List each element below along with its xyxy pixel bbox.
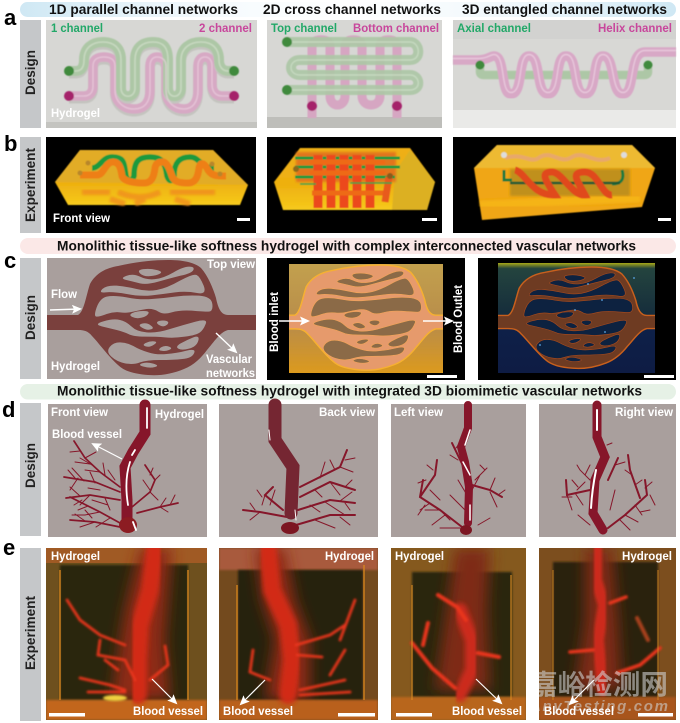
label: Hydrogel: Hydrogel: [51, 361, 100, 373]
panel: perfused vessel photo left: [391, 548, 526, 720]
sidebar: Design row d: [20, 403, 41, 536]
vessel tree: [418, 405, 505, 535]
arrow: flow: [50, 309, 80, 310]
panel: 1D experiment photo: [46, 137, 256, 233]
panel: vascular network design top view: [47, 258, 256, 380]
sidebar: Experiment row b: Experiment: [23, 148, 38, 222]
label: Helix channel: Helix channel: [598, 23, 672, 35]
label: Vascular: Vascular: [206, 354, 252, 366]
perfused vessel: [250, 550, 355, 695]
arrow: blood inlet: [279, 320, 308, 322]
scale bar: [644, 375, 674, 378]
panel: blood inlet outlet photo: [266, 258, 465, 380]
label: Front view: Front view: [53, 213, 110, 225]
sidebar: Design row a: [20, 20, 41, 128]
label: Blood vessel: Blood vessel: [452, 706, 522, 718]
heading: 2D networks: 2D cross channel networks: [263, 2, 441, 17]
label: Hydrogel: Hydrogel: [51, 551, 100, 563]
label: Bottom channel: Bottom channel: [353, 23, 439, 35]
perfused vessel: [408, 592, 502, 705]
label: Top channel: Top channel: [271, 23, 337, 35]
heading: 1D networks: 1D parallel channel networks: [49, 2, 238, 17]
arrow: blood vessel: [93, 444, 122, 459]
panel: 3D experiment photo: [453, 137, 676, 233]
label: Blood vessel: Blood vessel: [133, 706, 203, 718]
label: Blood inlet: Blood inlet: [269, 292, 281, 352]
label: Blood vessel: Blood vessel: [223, 706, 293, 718]
sidebar: Design row c: [20, 258, 41, 379]
panel label e: e: [3, 535, 15, 560]
sidebar: Experiment row e: Experiment: [23, 596, 38, 670]
label: Hydrogel: Hydrogel: [622, 551, 672, 563]
arrow: blood outlet: [423, 320, 452, 322]
channel tubes: [282, 37, 418, 118]
sidebar: Experiment row b: [20, 137, 41, 233]
panel: blood vessel front view: [48, 404, 207, 537]
panel: perfused vessel photo right: [529, 548, 676, 720]
panel: 1D parallel channel design: [46, 20, 257, 128]
panel label a: a: [4, 5, 17, 30]
label: Front view: Front view: [51, 407, 108, 419]
scale bar: [49, 713, 85, 716]
header bar: complex interconnected networks: Monolithic tissue-like softness hydrogel with complex interconnected vascular networks: [57, 238, 636, 254]
scale bar: [427, 375, 457, 378]
panel: blood vessel back view: [219, 404, 378, 537]
vessel tree: [64, 405, 178, 533]
label: Hydrogel: Hydrogel: [155, 409, 204, 421]
scale bar: [638, 713, 673, 716]
perfused vascular network: [289, 264, 443, 371]
panel: 3D entangled channel design: [453, 20, 676, 128]
arrow: blood vessel: [570, 680, 594, 704]
watermark: [539, 670, 668, 714]
watermark: 嘉峪检测网: [530, 669, 668, 700]
label: Hydrogel: Hydrogel: [325, 551, 374, 563]
arrow: blood vessel: [476, 679, 501, 703]
arrow: blood vessel: [152, 679, 176, 703]
panel: blood vessel right view: [539, 404, 676, 537]
speckles: [539, 277, 635, 346]
sidebar: Experiment row e: [20, 548, 41, 721]
vascular network: [47, 260, 256, 375]
watermark: AnyTesting.com: [529, 698, 668, 715]
label: Blood vessel: Blood vessel: [544, 706, 614, 718]
vessel tree: [562, 405, 655, 530]
hydrogel block: [274, 148, 435, 210]
panel: 2D experiment photo: [267, 137, 442, 233]
label: Blood vessel: Blood vessel: [52, 429, 122, 441]
hydrogel block: [55, 150, 248, 205]
header bar: channel network types: [20, 2, 676, 17]
panel: perfused vessel photo back: [219, 548, 378, 720]
label: networks: networks: [206, 368, 255, 380]
label: Axial channel: Axial channel: [457, 23, 531, 35]
panel label d: d: [2, 397, 15, 422]
heading: 3D networks: 3D entangled channel networks: [462, 2, 667, 17]
arrow: blood vessel: [241, 680, 265, 704]
panel label b: b: [4, 131, 17, 156]
panel: perfused vessel photo front: [46, 548, 207, 720]
label: Right view: Right view: [615, 407, 673, 419]
scale bar: [237, 218, 250, 221]
panel: 2D cross channel design: [267, 20, 442, 128]
header bar: integrated 3D biomimetic networks: Monolithic tissue-like softness hydrogel with integrated 3D biomimetic vascular networks: [57, 384, 642, 398]
fluorescent vascular network: [498, 266, 655, 370]
sidebar: Design row c: Design: [23, 295, 38, 340]
panel label c: c: [4, 248, 16, 273]
perfused vessel: [570, 550, 660, 690]
perfused vessel: [67, 550, 168, 695]
hydrogel block: [474, 145, 655, 220]
scale bar: [338, 713, 375, 716]
channel tubes: [453, 50, 676, 94]
label: Blood Outlet: Blood Outlet: [453, 285, 465, 353]
label: Top view: Top view: [207, 259, 255, 271]
label: Left view: Left view: [394, 407, 443, 419]
scale bar: [396, 713, 432, 716]
label: Hydrogel: Hydrogel: [395, 551, 444, 563]
label: Back view: Back view: [319, 407, 375, 419]
scale bar: [422, 218, 437, 221]
sidebar: Design row d: Design: [23, 443, 38, 488]
arrow: vascular networks: [216, 333, 236, 352]
scale bar: [658, 218, 671, 221]
sidebar: Design row a: Design: [23, 50, 38, 95]
label: 2 channel: 2 channel: [199, 23, 252, 35]
label: 1 channel: 1 channel: [51, 23, 103, 35]
vessel tree: [243, 405, 355, 534]
panel: fluorescent vascular photo: [478, 258, 676, 380]
label: Flow: Flow: [51, 289, 77, 301]
label: Hydrogel: Hydrogel: [51, 108, 100, 120]
channel tubes: [64, 42, 239, 112]
panel: blood vessel left view: [391, 404, 526, 537]
